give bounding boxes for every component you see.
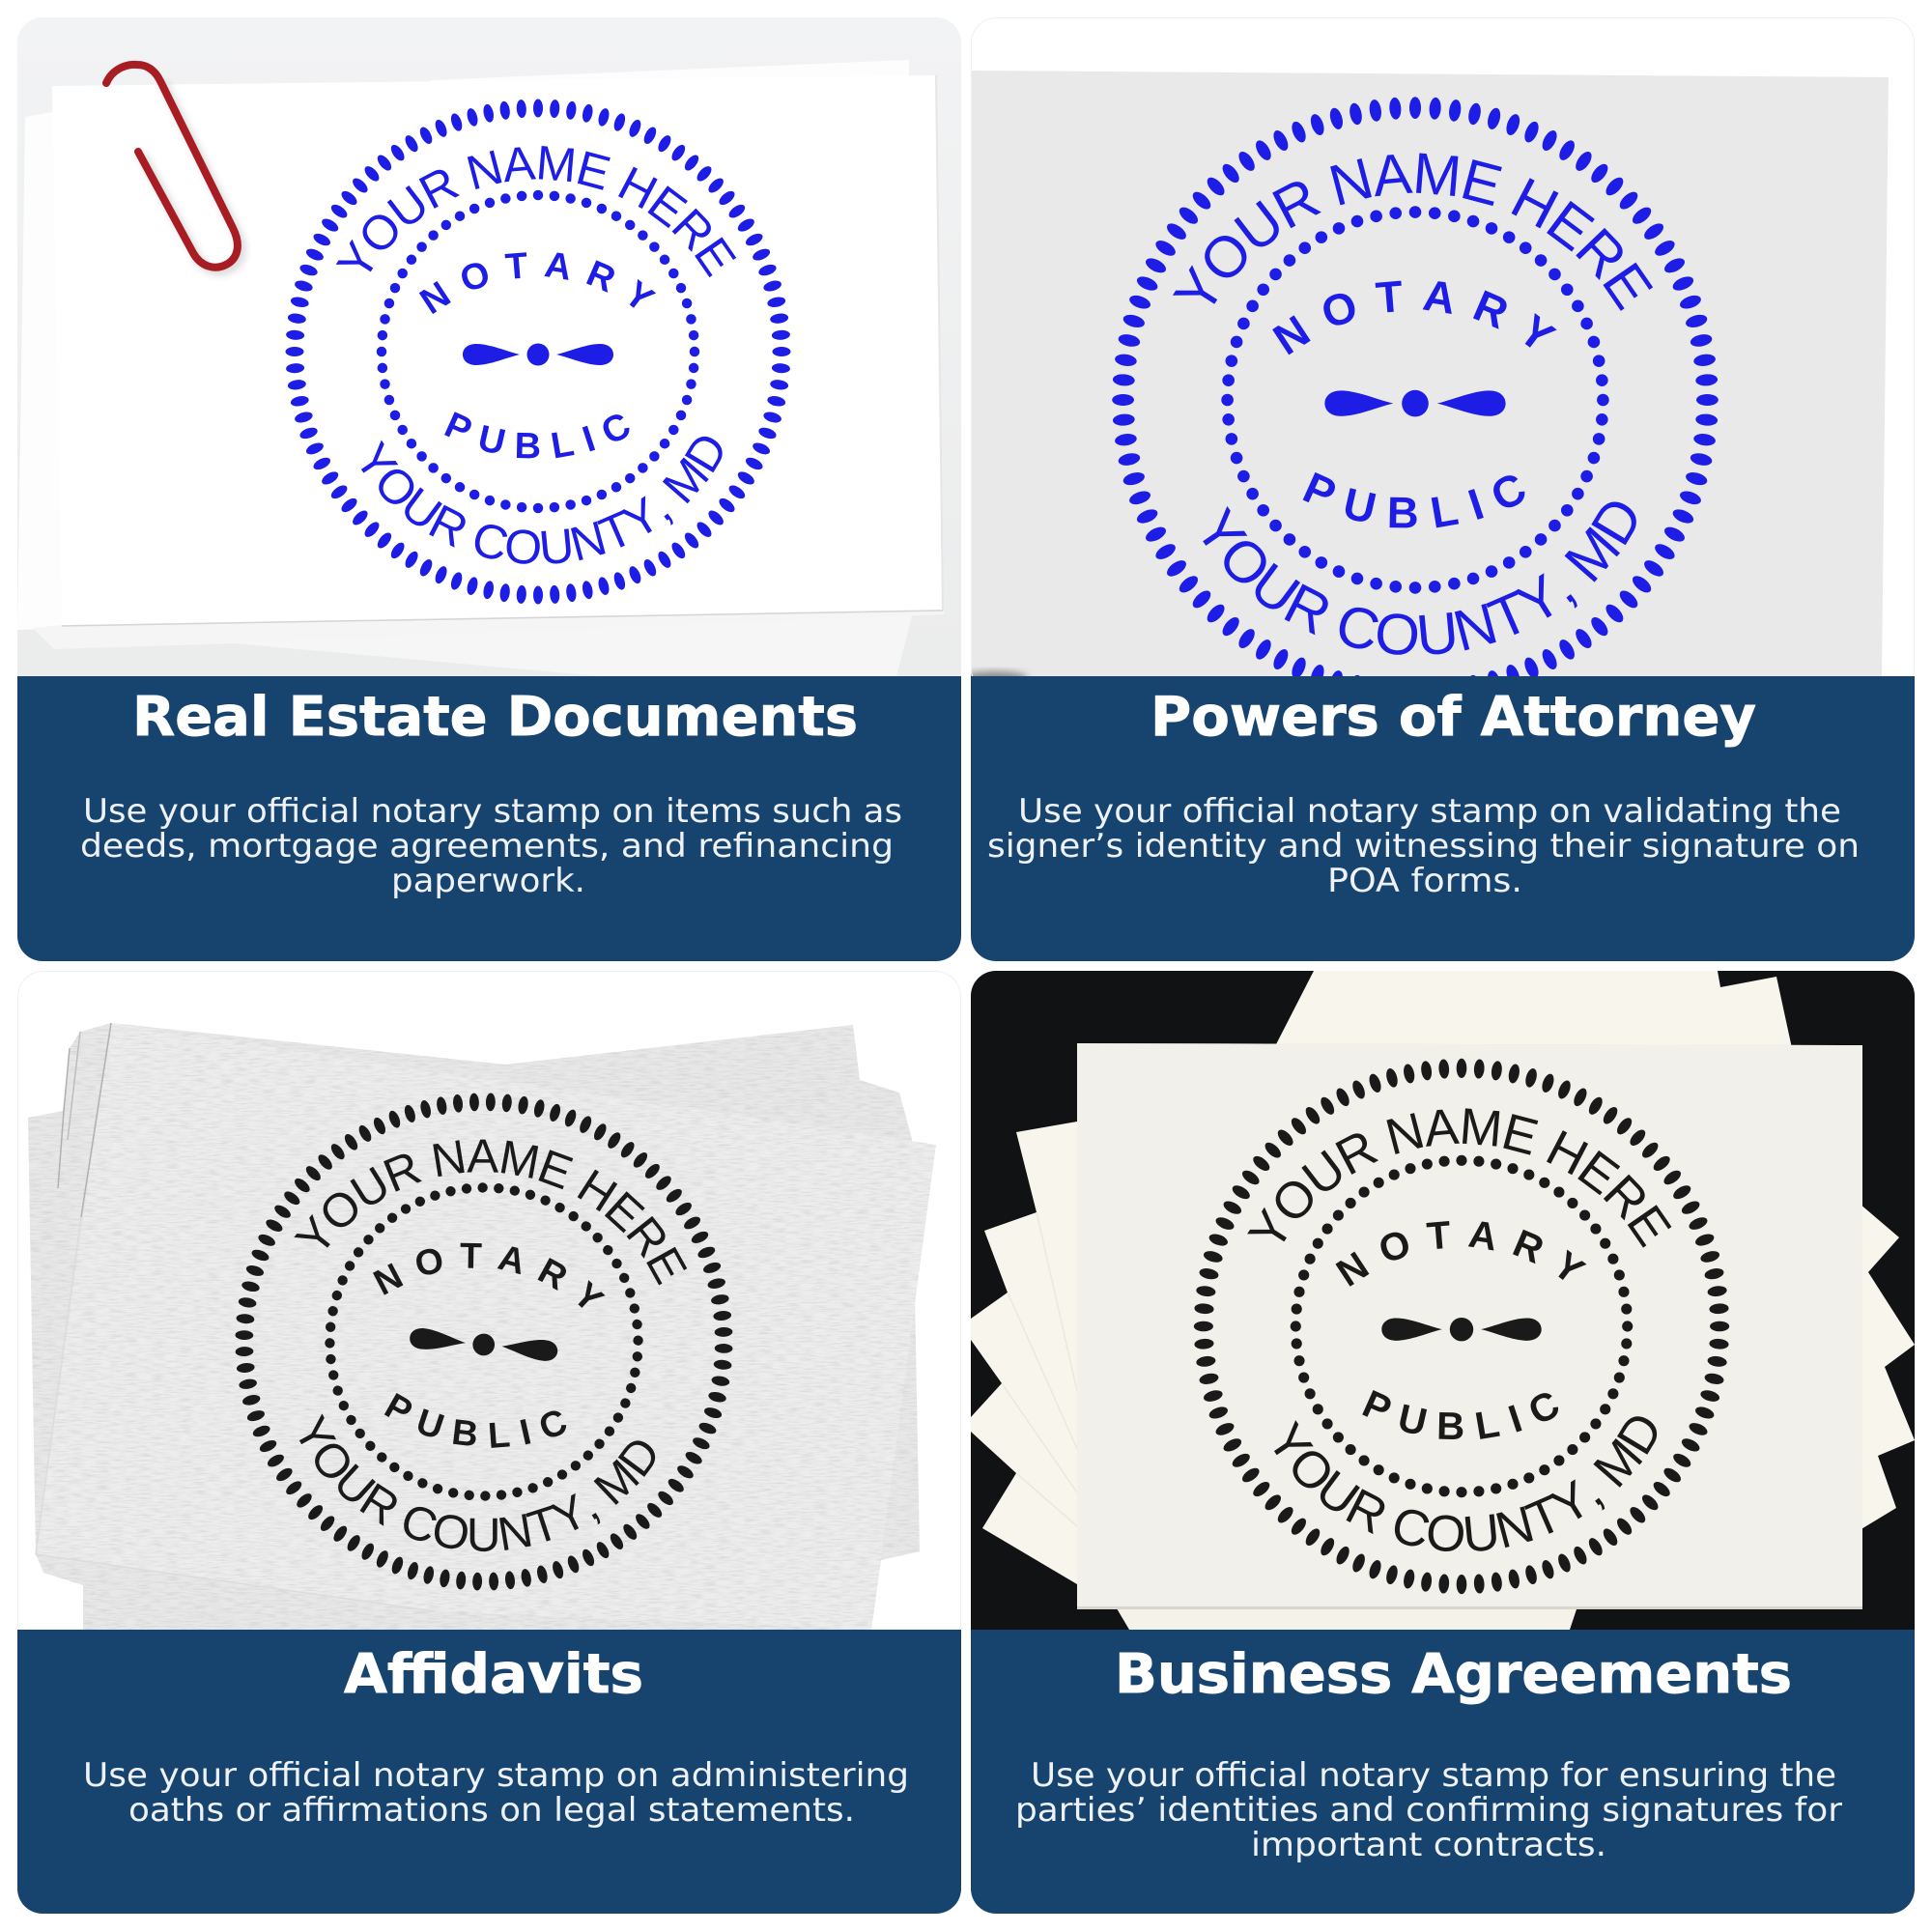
stamp impression: NOTARY (1272, 280, 1557, 355)
stamp impression: PUBLIC (1302, 471, 1524, 527)
description (987, 792, 1860, 900)
stamp impression: YOUR COUNTY, MD (1274, 1416, 1658, 1551)
stamp impression: YOUR NAME HERE (294, 1140, 688, 1285)
description (80, 792, 902, 900)
panel: business agreements (971, 971, 1915, 1914)
description: deeds, mortgage agreements, and refinancing (80, 827, 894, 866)
panel: powers of attorney (971, 17, 1915, 961)
heading: Affidavits (344, 1643, 643, 1706)
stamp impression: PUBLIC (1362, 1390, 1559, 1439)
photo: black stamp on textured paper stack (17, 971, 961, 1630)
heading: Business Agreements (1115, 1643, 1792, 1706)
heading: Real Estate Documents (132, 686, 858, 749)
panel: real estate documents (17, 17, 961, 961)
description: Use your official notary stamp on administering (83, 1756, 909, 1795)
stamp impression (286, 99, 790, 605)
stamp impression: YOUR NAME HERE (336, 146, 736, 278)
description: Use your official notary stamp on items such as (83, 792, 902, 831)
stamp impression: YOUR COUNTY, MD (1203, 502, 1636, 655)
description (83, 1756, 909, 1830)
caption band (971, 676, 1915, 961)
description: Use your official notary stamp on validating the (1018, 792, 1841, 831)
paper clip (106, 65, 242, 271)
caption band (971, 1630, 1915, 1914)
photo: black stamp on cream cards over black background (971, 971, 1915, 1630)
stamp impression: YOUR NAME HERE (1247, 1108, 1671, 1248)
stamp impression (1194, 1059, 1729, 1594)
stamp impression: PUBLIC (444, 412, 630, 458)
description (1015, 1756, 1842, 1864)
stamp impression: NOTARY (419, 252, 657, 315)
stamp impression (236, 1094, 732, 1590)
stamp impression: NOTARY (373, 1242, 605, 1308)
stamp impression: YOUR NAME HERE (1173, 153, 1654, 311)
caption band (17, 676, 961, 961)
photo: blue stamp on grey paper (971, 17, 1915, 676)
heading: Powers of Attorney (1151, 686, 1756, 749)
description: parties’ identities and confirming signatures for (1015, 1791, 1842, 1830)
stamp impression: YOUR COUNTY, MD (361, 437, 723, 564)
description: POA forms. (1327, 862, 1522, 900)
description: paperwork. (391, 862, 585, 900)
description: Use your official notary stamp for ensuring the (1031, 1756, 1836, 1795)
stamp impression: YOUR COUNTY, MD (299, 1414, 655, 1551)
caption band (17, 1630, 961, 1914)
description: oaths or affirmations on legal statements. (128, 1791, 855, 1830)
stamp impression (1112, 97, 1719, 676)
description: important contracts. (1251, 1826, 1606, 1864)
photo: blue stamp on white cards with paper clip (17, 17, 961, 676)
stamp impression: NOTARY (1335, 1221, 1586, 1287)
panel: affidavits (17, 971, 961, 1914)
description: signer’s identity and witnessing their signature on (987, 827, 1860, 866)
stamp impression: PUBLIC (384, 1393, 566, 1448)
